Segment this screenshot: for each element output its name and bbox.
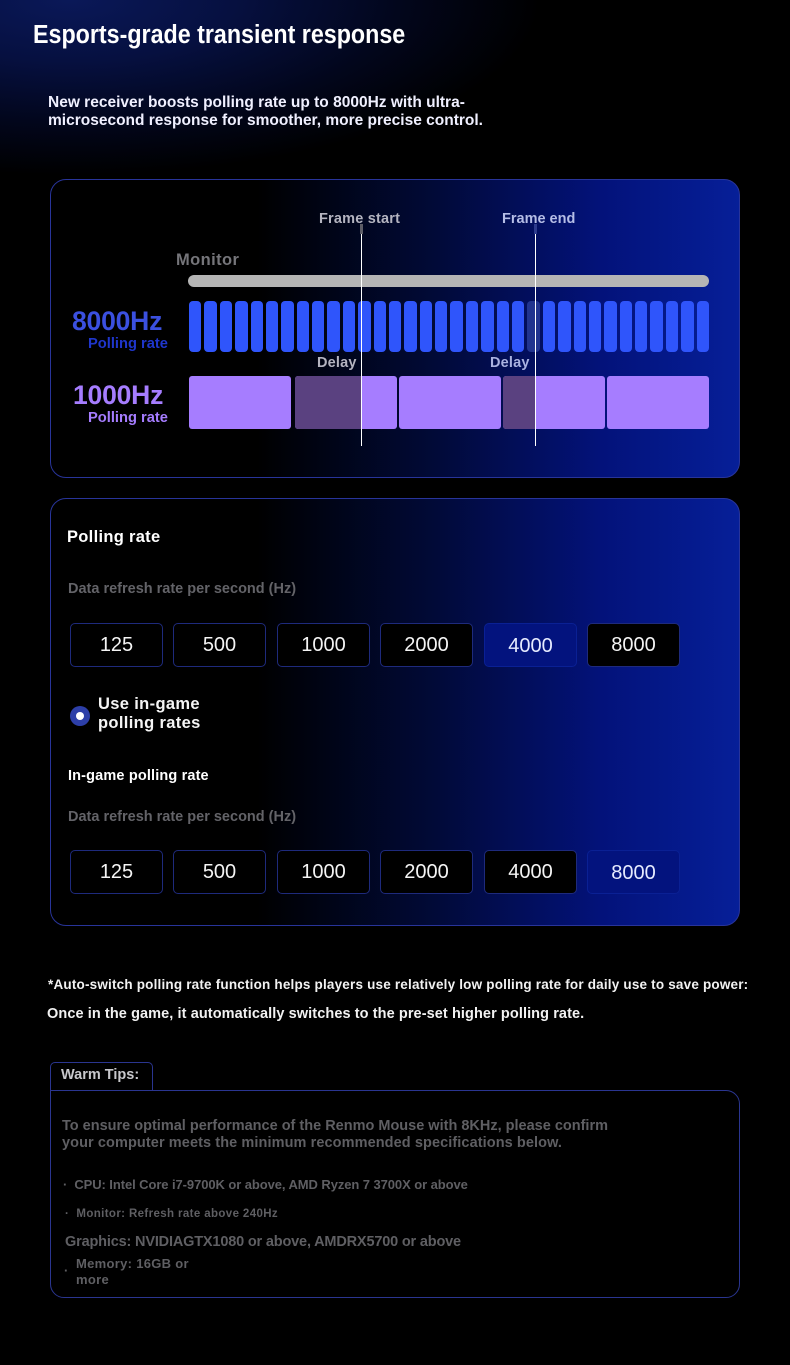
label: 8000Hz: 8000Hz [72,306,162,336]
spec: memory [76,1256,189,1287]
tips intro: your computer meets the minimum recommended specifications below. [62,1135,562,1151]
frame start marker [360,224,363,446]
monitor bar [188,275,709,287]
label: frame start: Frame start [319,211,400,227]
caption: in-game data refresh rate: Data refresh rate per second (Hz) [68,809,296,825]
label: frame end: Frame end [502,211,575,227]
caption: data refresh rate: Data refresh rate per second (Hz) [68,581,296,597]
rate buttons: 8000 [611,634,656,656]
in-game rate buttons: 8000 [611,862,656,884]
footnote second line: Once in the game, it automatically switches to the pre-set higher polling rate. [47,1006,584,1022]
panel: warm tips [50,1090,740,1298]
tips intro: To ensure optimal performance of the Renmo Mouse with 8KHz, please confirm [62,1118,608,1134]
in-game rate buttons: 500 [203,861,236,883]
8000Hz bars [189,301,709,352]
1000Hz blocks [189,376,709,429]
in-game rate buttons: 1000 [301,861,346,883]
rate buttons [70,623,680,667]
tab: warm tips [50,1062,153,1091]
label: 1000Hz polling rate: Polling rate [88,410,168,426]
intro text [48,94,483,129]
rate buttons: 1000 [301,634,346,656]
spec: memory bullet: · [64,1263,68,1278]
label: 1000Hz: 1000Hz [73,380,163,410]
panel: polling rate settings [50,498,740,926]
radio icon [70,706,90,726]
spec: CPU: · CPU: Intel Core i7-9700K or above, AMD Ryzen 7 3700X or above [63,1177,468,1192]
rate buttons: 500 [203,634,236,656]
tab label: Warm Tips: [61,1067,139,1083]
frame end marker [534,224,537,446]
panel: polling timing diagram [50,179,740,478]
heading: in-game polling rate: In-game polling rate [68,768,209,784]
intro text: New receiver boosts polling rate up to 8000Hz with ultra- [48,94,465,111]
in-game rate buttons [70,850,680,894]
in-game rate buttons: 125 [100,861,133,883]
intro text: microsecond response for smoother, more precise control. [48,112,483,129]
spec: graphics: Graphics: NVIDIAGTX1080 or above, AMDRX5700 or above [65,1234,461,1250]
title: Esports-grade transient response [33,21,405,49]
label: delay left: Delay [317,355,357,371]
radio label [98,695,201,732]
rate buttons: 125 [100,634,133,656]
in-game rate buttons: 4000 [508,861,553,883]
tips intro [62,1118,608,1151]
background glow [0,0,790,190]
label: delay right: Delay [490,355,530,371]
rate buttons: 2000 [404,634,449,656]
spec: monitor: · Monitor: Refresh rate above 240Hz [65,1208,278,1220]
radio label: Use in-game [98,695,200,713]
spec: memory: more [76,1272,109,1287]
label: 8000Hz polling rate: Polling rate [88,336,168,352]
heading: polling rate: Polling rate [67,528,160,546]
footnote: *Auto-switch polling rate function helps players use relatively low polling rate for daily use to save power: [48,977,748,992]
in-game rate buttons: 2000 [404,861,449,883]
spec: memory: Memory: 16GB or [76,1256,189,1271]
rate buttons: 4000 [508,635,553,657]
radio label: polling rates [98,714,201,732]
label: monitor: Monitor [176,251,239,269]
